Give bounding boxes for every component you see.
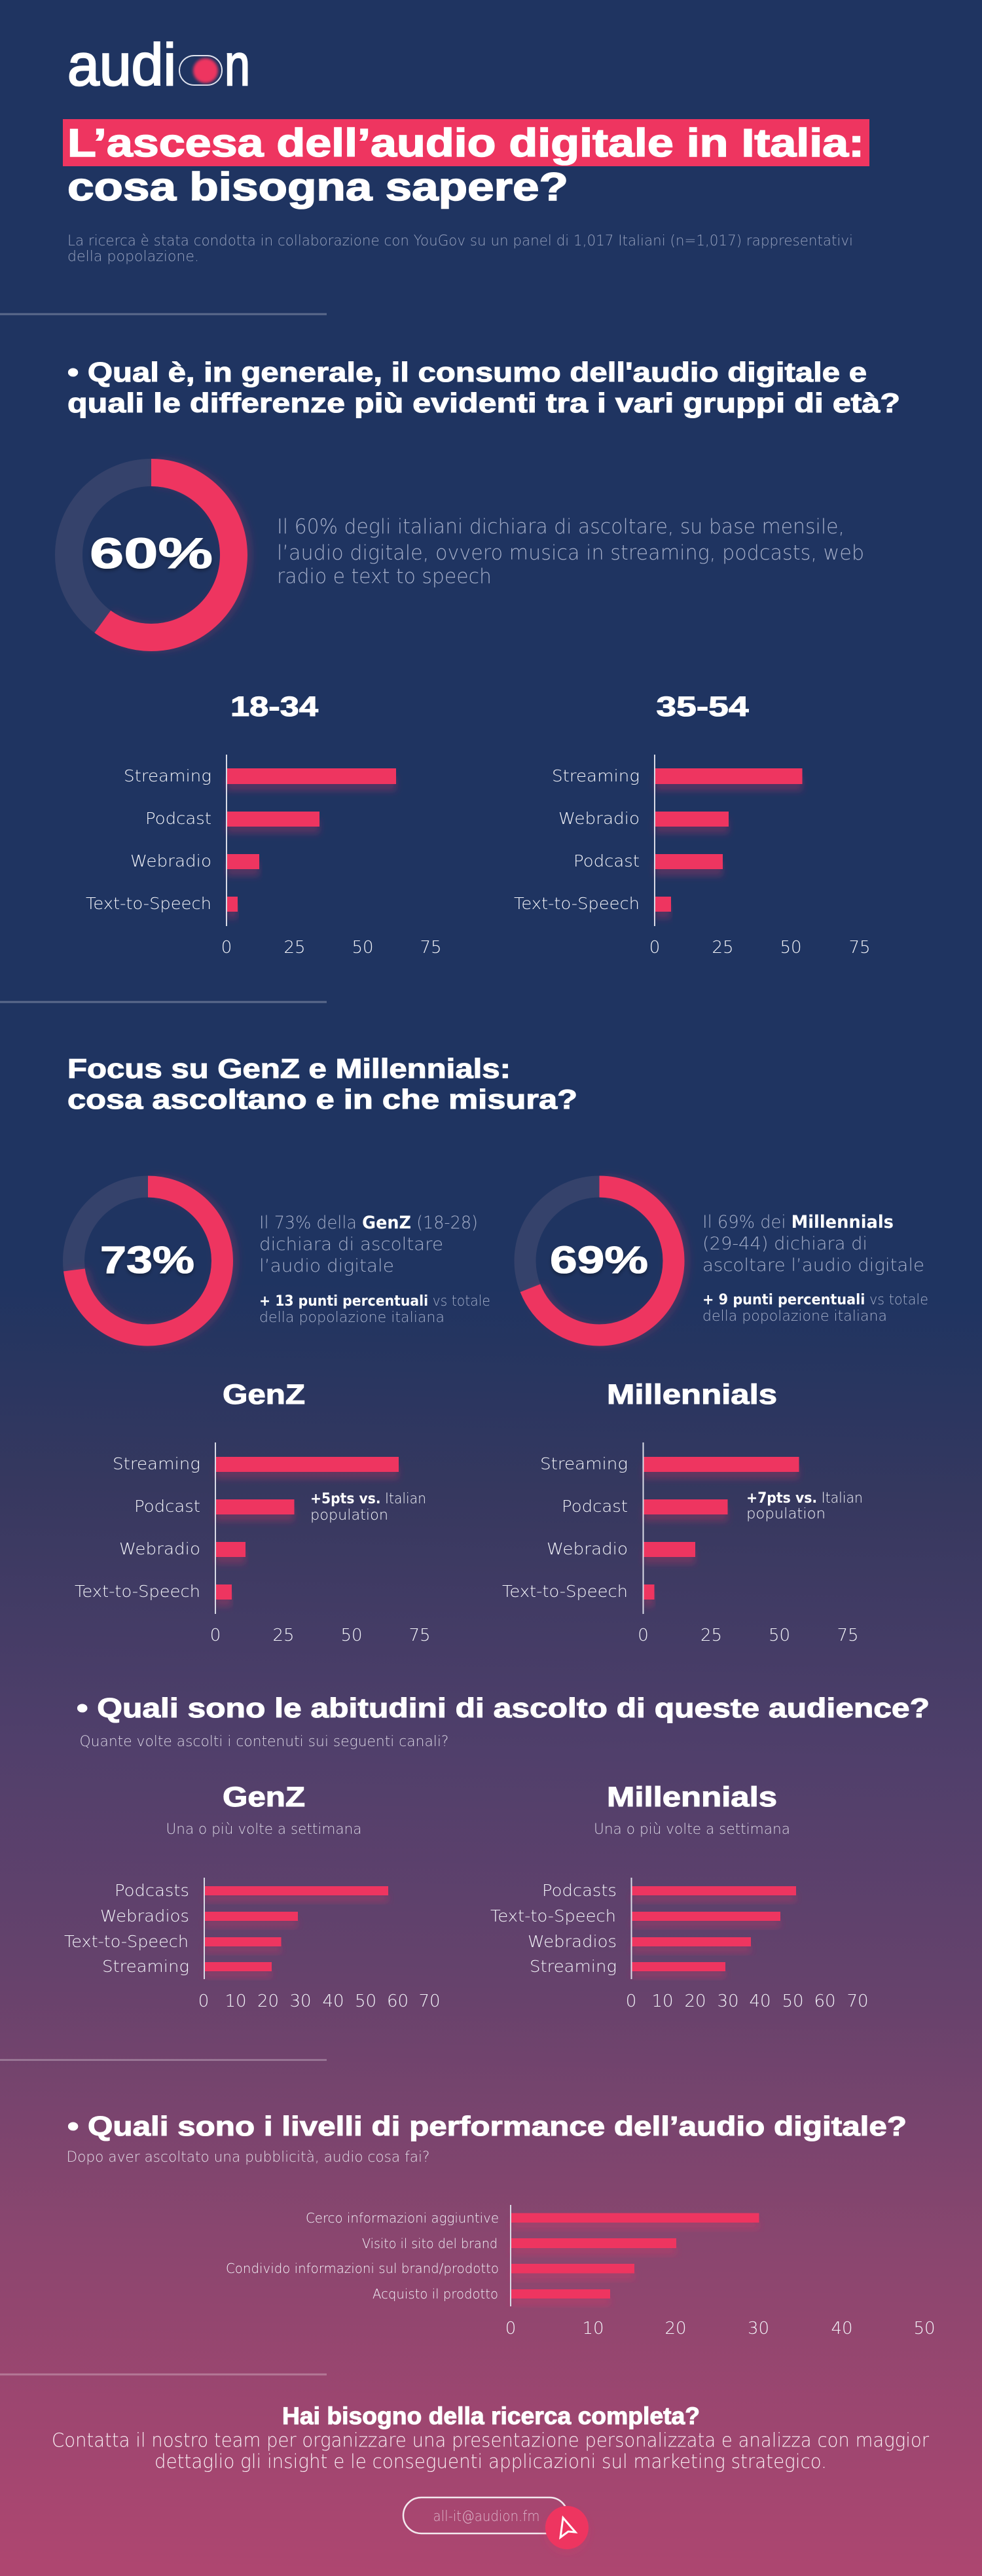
bar chart: GenZ weekly: 0 [198,1992,209,2011]
bar chart: GenZ weekly: 70 [418,1992,441,2011]
heading: abitudini di ascolto: • Quali sono le abitudini di ascolto di queste audience? [77,1692,930,1723]
bar chart: 18-34: Streaming [124,766,211,785]
call to action text: Hai bisogno della ricerca completa? [282,2403,700,2429]
bar chart: Millennials weekly: 50 [782,1992,804,2011]
bar chart: 35-54: Podcast [573,851,640,870]
text: GenZ 73%: Il 73% della GenZ (18-28) [259,1213,478,1233]
bar chart: 18-34: Text-to-Speech [86,894,211,913]
bar chart: performance: 50 [913,2319,936,2338]
bar chart: 18-34: 75 [420,938,442,957]
bar chart: 35-54: Text-to-Speech [514,894,640,913]
chart title: Millennials weekly: Una o più volte a settimana [594,1821,790,1838]
chart title: GenZ: GenZ [223,1379,305,1410]
logo: audion [67,33,250,98]
bar chart: performance: Cerco informazioni aggiuntive [306,2210,499,2226]
heading: focus GenZ e Millennials: Focus su GenZ e Millennials: [67,1053,511,1084]
text: GenZ 73% [259,1213,490,1326]
bar chart: Millennials listening [502,1442,859,1645]
bar chart: performance [226,2205,936,2338]
call to action text: dettaglio gli insight e le conseguenti applicazioni sul marketing strategico. [155,2450,827,2473]
contact button [403,2497,589,2549]
callout: +7pts [746,1490,863,1522]
bar chart: GenZ weekly: 40 [322,1992,344,2011]
bar chart: performance: Visito il sito del brand [362,2236,498,2251]
bar chart: GenZ weekly: 50 [355,1992,376,2011]
contact button: all-it@audion.fm [433,2509,539,2525]
bar chart: 18-34: Webradio [130,851,211,870]
bar chart: performance: Acquisto il prodotto [373,2286,498,2302]
intro text [67,233,853,265]
text: Millennials 69%: ascoltare l’audio digitale [702,1255,924,1276]
chart title: Millennials weekly: Millennials [607,1781,777,1813]
bar chart: performance: 0 [505,2319,516,2338]
text: GenZ 73%: della popolazione italiana [259,1310,445,1326]
bar chart: performance: 40 [831,2319,853,2338]
bar chart: 35-54 [514,755,871,957]
bar chart: GenZ listening: 0 [210,1626,221,1645]
heading: focus GenZ e Millennials [67,1053,577,1115]
bar chart: Millennials weekly: 0 [626,1992,636,2011]
donut chart: 73% [73,1187,223,1335]
bar chart: 35-54: Webradio [558,809,640,828]
text: Millennials 69%: Il 69% dei Millennials [702,1212,894,1232]
bar chart: Millennials weekly: Webradios [528,1932,617,1951]
call to action text: Contatta il nostro team per organizzare una presentazione personalizzata e analizza con maggior [52,2429,929,2452]
bar chart: GenZ weekly: Podcasts [115,1881,189,1900]
chart title: 35-54: 35-54 [656,691,749,723]
donut chart: 69%: 69% [550,1239,648,1281]
bar chart: GenZ weekly: 20 [257,1992,279,2011]
bar chart: Millennials listening: 25 [700,1626,722,1645]
text: GenZ 73%: dichiara di ascoltare [259,1234,443,1255]
bar chart: GenZ weekly: 60 [387,1992,409,2011]
bar chart: 18-34: 0 [221,938,232,957]
chart title: GenZ weekly: Una o più volte a settimana [166,1821,361,1838]
bar chart: GenZ listening: 25 [272,1626,295,1645]
donut chart: 73%: 73% [100,1239,194,1281]
bar chart: Millennials weekly: 40 [749,1992,771,2011]
icon: send arrow [545,2506,589,2549]
bar chart: GenZ listening: 50 [340,1626,363,1645]
bar chart: Millennials weekly: 20 [684,1992,706,2011]
bar chart: performance: 10 [582,2319,604,2338]
heading: consumo audio digitale: quali le differenze più evidenti tra i vari gruppi di età? [67,387,900,418]
bar chart: Millennials weekly [490,1878,869,2011]
text: 60% description: l’audio digitale, ovvero musica in streaming, podcasts, web [277,541,864,565]
text: Millennials 69% [702,1212,928,1325]
bar chart: 35-54: 75 [848,938,871,957]
bar chart: Millennials weekly: Text-to-Speech [490,1906,616,1925]
bar chart: Millennials listening: Webradio [547,1539,628,1558]
chart title: Millennials weekly [594,1781,790,1838]
bar chart: performance: Condivido informazioni sul brand/prodotto [226,2261,499,2276]
heading: consumo audio digitale: • Qual è, in generale, il consumo dell'audio digitale e [67,357,867,387]
donut chart: 60%: 60% [90,529,213,577]
bar chart: GenZ listening: Podcast [134,1497,200,1516]
chart title: 18-34: 18-34 [230,691,318,723]
text: 60% description [277,515,864,588]
logo: audion: n [225,33,250,98]
heading: performance: Dopo aver ascoltato una pubblicità, audio cosa fai? [67,2149,429,2166]
bar chart: Millennials weekly: 70 [846,1992,869,2011]
bar chart: GenZ listening: Text-to-Speech [75,1582,200,1601]
bar chart: performance: 30 [748,2319,769,2338]
text: Millennials 69%: della popolazione italiana [702,1308,887,1325]
bar chart: 18-34: 25 [283,938,306,957]
chart title: Millennials: Millennials [607,1379,777,1410]
call to action text [52,2403,929,2473]
bar chart: Millennials listening: 75 [837,1626,859,1645]
chart title: GenZ weekly [166,1781,361,1838]
bar chart: 18-34: 50 [352,938,374,957]
bar chart: Millennials listening: 0 [638,1626,649,1645]
text: Millennials 69%: + 9 punti percentuali vs totale [702,1292,928,1308]
heading: performance: • Quali sono i livelli di performance dell’audio digitale? [67,2111,907,2141]
text: 60% description: Il 60% degli italiani dichiara di ascoltare, su base mensile, [277,515,845,539]
bar chart: 18-34: Podcast [145,809,211,828]
bar chart: GenZ listening: 75 [409,1626,431,1645]
callout: +7pts: +7pts vs. Italian [746,1490,863,1507]
bar chart: 35-54: 25 [712,938,734,957]
bar chart: GenZ weekly: Webradios [100,1906,189,1925]
callout: +5pts: population [310,1507,388,1524]
heading: performance [67,2111,907,2166]
title: L’ascesa dell’audio digitale in Italia: [67,121,864,165]
intro text: della popolazione. [67,249,199,265]
bar chart: GenZ weekly: Text-to-Speech [64,1932,189,1951]
bar chart: GenZ listening [75,1442,431,1645]
text: GenZ 73%: + 13 punti percentuali vs totale [259,1293,490,1310]
bar chart: 18-34 [86,755,442,957]
callout: +5pts [310,1491,426,1524]
heading: abitudini di ascolto [77,1692,930,1750]
bar chart: Millennials weekly: Streaming [530,1957,617,1976]
bar chart: GenZ weekly: 10 [225,1992,247,2011]
bar chart: GenZ weekly [64,1878,441,2011]
bar chart: GenZ listening: Webradio [119,1539,200,1558]
logo: audion: audi [67,33,176,98]
bar chart: Millennials weekly: 30 [717,1992,739,2011]
heading: consumo audio digitale [67,357,900,418]
bar chart: Millennials weekly: Podcasts [542,1881,617,1900]
title [63,119,869,209]
title: cosa bisogna sapere? [67,165,568,209]
bar chart: Millennials listening: Text-to-Speech [502,1582,628,1601]
intro text: La ricerca è stata condotta in collaborazione con YouGov su un panel di 1,017 Italiani (n=1,017) rappresentativi [67,233,853,249]
chart title: GenZ weekly: GenZ [223,1781,305,1813]
text: GenZ 73%: l’audio digitale [259,1256,394,1276]
bar chart: 35-54: Streaming [552,766,640,785]
donut chart: 69% [525,1187,674,1335]
bar chart: GenZ weekly: Streaming [102,1957,189,1976]
bar chart: performance: 20 [664,2319,687,2338]
text: 60% description: radio e text to speech [277,565,492,588]
bar chart: GenZ listening: Streaming [113,1454,200,1473]
heading: focus GenZ e Millennials: cosa ascoltano e in che misura? [67,1084,577,1115]
bar chart: Millennials listening: Streaming [540,1454,628,1473]
bar chart: Millennials weekly: 10 [651,1992,674,2011]
heading: abitudini di ascolto: Quante volte ascolti i contenuti sui seguenti canali? [80,1734,449,1750]
bar chart: Millennials listening: Podcast [562,1497,628,1516]
text: Millennials 69%: (29-44) dichiara di [702,1234,867,1254]
bar chart: 35-54: 0 [649,938,660,957]
bar chart: Millennials weekly: 60 [814,1992,836,2011]
bar chart: GenZ weekly: 30 [289,1992,312,2011]
callout: +5pts: +5pts vs. Italian [310,1491,426,1507]
bar chart: Millennials listening: 50 [769,1626,790,1645]
callout: +7pts: population [746,1506,826,1522]
bar chart: 35-54: 50 [780,938,802,957]
donut chart: 60% [69,473,234,637]
